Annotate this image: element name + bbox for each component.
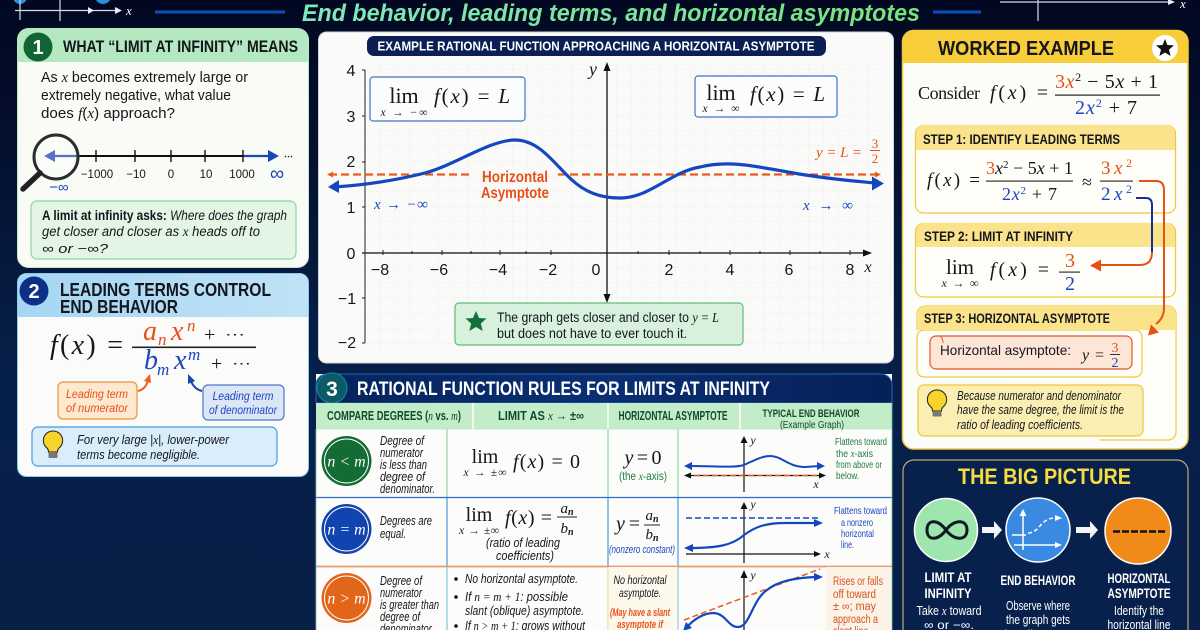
grid xyxy=(365,62,881,351)
row 2: n equals m: n xyxy=(653,533,659,544)
definition callout: get closer and closer as x heads off to xyxy=(42,224,260,239)
given function: 2x xyxy=(1075,97,1095,119)
title rule right xyxy=(933,10,981,14)
step 1: STEP 1: IDENTIFY LEADING TERMS xyxy=(923,132,1120,147)
limit at infinity caption: INFINITY xyxy=(924,586,972,601)
arrow xyxy=(1076,521,1098,539)
number badge 2 xyxy=(20,276,48,306)
graph note callout xyxy=(455,303,743,345)
step 1: + 7 xyxy=(1027,184,1057,204)
row 2: n equals m: b xyxy=(645,527,653,543)
step 1: 3x xyxy=(986,158,1003,178)
row 1: n less than m xyxy=(322,433,887,496)
answer box: y = xyxy=(1080,347,1104,364)
row 1: n less than m: f(x) = 0 xyxy=(513,451,580,473)
general rational formula: n xyxy=(158,330,166,349)
general rational formula: n xyxy=(187,316,196,335)
row 1: n less than m: x → ±∞ xyxy=(462,467,506,479)
asymptote equation: 2 xyxy=(872,151,878,166)
panel 3: rational function rules table xyxy=(316,373,892,630)
horizontal asymptote line xyxy=(327,172,881,178)
number line: −∞ xyxy=(49,179,69,196)
row 3: n greater than m: approach a xyxy=(833,614,878,626)
numerator label: Leading term xyxy=(66,387,128,401)
icon: magnifying glass xyxy=(23,135,78,189)
asymptote label xyxy=(481,169,549,202)
row 2: n equals m: a nonzero xyxy=(841,517,873,529)
column headers: LIMIT AS x → ±∞ xyxy=(498,408,584,423)
row 2: n equals m: equal. xyxy=(380,527,406,541)
row 1: n less than m: from above or xyxy=(836,459,882,471)
number badge 1: 1 xyxy=(32,37,44,59)
top banner xyxy=(13,0,1186,27)
panel: worked example xyxy=(902,30,1188,449)
x tick labels: −2 xyxy=(539,262,557,279)
row 2: n equals m: n xyxy=(568,527,574,538)
axes xyxy=(338,59,872,352)
x tick labels: −6 xyxy=(430,262,448,279)
given function: Consider xyxy=(918,83,980,103)
x tick labels: −8 xyxy=(371,262,389,279)
limit at infinity caption xyxy=(916,570,982,630)
step 1 xyxy=(916,125,1176,213)
row 3: n greater than m: Degree of xyxy=(380,574,423,588)
blue function curve xyxy=(328,140,884,198)
limit box left: x → −∞ xyxy=(380,107,428,119)
row 2: n equals m xyxy=(322,497,887,563)
step 1: ≈ xyxy=(1082,172,1092,192)
row 2: n equals m: a xyxy=(645,508,653,524)
row 2: n equals m: line. xyxy=(841,539,854,551)
badge n=m xyxy=(322,504,372,554)
y tick labels: 1 xyxy=(347,200,356,217)
tip callout xyxy=(32,427,277,466)
graph title pill xyxy=(367,36,826,56)
end behavior caption: the graph gets xyxy=(1006,613,1070,627)
given function: − 5 xyxy=(1082,71,1115,93)
tip callout: terms become negligible. xyxy=(77,447,200,462)
step 1: f(x) = xyxy=(927,170,980,191)
given function: x + 1 xyxy=(1115,71,1158,93)
limit box right xyxy=(695,76,837,117)
graph title pill: EXAMPLE RATIONAL FUNCTION APPROACHING A HORIZONTAL ASYMPTOTE xyxy=(378,40,814,54)
badge n>m: n > m xyxy=(327,590,366,608)
row 2: n equals m: n xyxy=(568,507,574,518)
step 1: x + 1 xyxy=(1037,158,1073,178)
column headers: (Example Graph) xyxy=(780,420,844,431)
explanation tip: ratio of leading coefficients. xyxy=(957,418,1083,432)
limit at infinity caption: LIMIT AT xyxy=(924,570,972,585)
row 3: n greater than m xyxy=(322,567,891,630)
end behavior caption: Observe where xyxy=(1006,599,1070,613)
step 3: STEP 3: HORIZONTAL ASYMPTOTE xyxy=(924,311,1110,326)
icon: star badge xyxy=(1152,35,1178,61)
general rational formula: ⋯ xyxy=(232,357,251,372)
intro question: does f(x) approach? xyxy=(41,105,175,122)
mini graph 3 xyxy=(683,568,823,630)
general rational formula: a xyxy=(143,316,157,347)
row 3: n greater than m: off toward xyxy=(833,589,876,601)
table grid lines xyxy=(316,403,892,630)
step 2 xyxy=(916,223,1176,297)
y tick labels: −2 xyxy=(338,335,356,352)
row 1: n less than m: Degree of xyxy=(380,434,425,448)
general rational formula: m xyxy=(157,360,169,379)
given function: 2 xyxy=(1096,96,1102,110)
step 1: 2 xyxy=(1126,156,1132,170)
row 3: n greater than m: No horizontal asymptote. xyxy=(465,571,578,586)
number line: ∞ xyxy=(270,163,284,185)
row 2: n equals m: Degrees are xyxy=(380,514,432,528)
row 2: n equals m: (ratio of leading xyxy=(486,536,560,550)
number badge 3 xyxy=(317,373,347,403)
horizontal asymptote caption: HORIZONTAL xyxy=(1108,571,1170,586)
general rational formula: + xyxy=(211,353,222,375)
row 1: n less than m: y = 0 xyxy=(622,447,662,469)
top right mini axes xyxy=(1000,0,1186,21)
intro question: extremely negative, what value xyxy=(41,87,231,104)
row 2: n equals m: y = xyxy=(614,513,640,535)
denominator label: of denominator xyxy=(209,403,278,417)
given function: 3x xyxy=(1055,71,1074,93)
title rule left xyxy=(155,10,285,14)
circle: infinity xyxy=(914,498,978,562)
row 1: n less than m: degree of xyxy=(380,470,426,484)
asymptote equation xyxy=(814,136,880,166)
mini graph 2 xyxy=(684,497,830,563)
step 1: − 5 xyxy=(1009,158,1037,178)
badge n>m xyxy=(322,573,372,623)
step 2: 2 xyxy=(1065,273,1075,295)
left approach label: x → −∞ xyxy=(373,197,428,213)
general rational formula: m xyxy=(188,345,200,364)
number badge 2: 2 xyxy=(28,281,40,303)
row 1: n less than m: the x-axis xyxy=(836,448,873,460)
end behavior caption xyxy=(1000,573,1076,630)
row 1: n less than m: denominator. xyxy=(380,482,435,496)
panel 2: leading terms control end behavior xyxy=(18,274,308,476)
given function xyxy=(918,70,1160,119)
given function: + 7 xyxy=(1103,97,1137,119)
explanation tip xyxy=(918,385,1143,436)
badge n<m: n < m xyxy=(327,454,366,470)
row 2: n equals m: x → ±∞ xyxy=(458,525,499,537)
row 1: n less than m: numerator xyxy=(380,446,424,460)
row 3: n greater than m: is greater than xyxy=(380,598,439,612)
row 1: n less than m: Flattens toward xyxy=(835,436,887,448)
panel: the big picture xyxy=(903,460,1188,630)
step 2: f(x) = xyxy=(990,259,1049,281)
row 3: n greater than m: numerator xyxy=(380,586,423,600)
row 2: n equals m: a xyxy=(560,501,568,517)
numerator label xyxy=(58,374,151,419)
step 2: STEP 2: LIMIT AT INFINITY xyxy=(924,229,1073,244)
row 3: n greater than m: (May have a slant xyxy=(610,607,671,619)
panel 3 heading: RATIONAL FUNCTION RULES FOR LIMITS AT INFINITY xyxy=(357,378,770,400)
mini graph 1: y xyxy=(749,433,756,447)
number badge 1 xyxy=(24,32,52,62)
x tick labels: −4 xyxy=(489,262,507,279)
asymptote equation: y = L = xyxy=(814,145,862,161)
x tick labels xyxy=(371,262,855,279)
step 2: 3 xyxy=(1065,250,1075,272)
number line: −1000 xyxy=(81,169,113,181)
horizontal asymptote caption: ASYMPTOTE xyxy=(1108,586,1170,601)
circle: horizontal asymptote xyxy=(1105,498,1171,564)
limit box left xyxy=(370,77,525,121)
row 2: n equals m: coefficients) xyxy=(496,549,554,563)
big picture heading: THE BIG PICTURE xyxy=(958,464,1131,489)
badge n=m: n = m xyxy=(327,522,366,538)
definition callout: A limit at infinity asks: Where does the graph xyxy=(42,208,287,223)
answer box: Horizontal asymptote: xyxy=(940,342,1071,358)
column headers: TYPICAL END BEHAVIOR xyxy=(762,408,860,420)
row 2: n equals m: (nonzero constant) xyxy=(609,544,675,556)
graph note callout: but does not have to ever touch it. xyxy=(497,326,687,341)
mini graph 2: y xyxy=(749,497,756,511)
row 3: n greater than m: degree of xyxy=(380,610,421,624)
row 1: n less than m: (the x-axis) xyxy=(619,469,667,483)
step 1: 2 xyxy=(1020,185,1026,197)
row 1: n less than m: below. xyxy=(836,470,859,482)
row 2: n equals m: lim xyxy=(466,504,493,526)
y tick labels: −1 xyxy=(338,291,356,308)
general rational formula: ⋯ xyxy=(225,328,245,343)
explanation tip: have the same degree, the limit is the xyxy=(957,403,1124,417)
row 3: n greater than m: asymptote. xyxy=(619,588,661,600)
row 2: n equals m: horizontal xyxy=(841,528,874,540)
definition callout: ∞ or −∞? xyxy=(42,241,109,256)
column headers: HORIZONTAL ASYMPTOTE xyxy=(618,408,728,423)
step 1: 2x xyxy=(1101,184,1122,205)
horizontal asymptote caption xyxy=(1108,571,1171,630)
y tick labels: 2 xyxy=(347,154,356,171)
right approach label: x → ∞ xyxy=(802,198,853,214)
step 1: 2x xyxy=(1002,184,1020,204)
row 1: n less than m: is less than xyxy=(380,458,427,472)
row 3: n greater than m: slant (oblique) asymptote. xyxy=(465,603,584,618)
step 1: 2 xyxy=(1003,159,1009,171)
row 2: n equals m: f(x) = xyxy=(505,507,552,529)
limit box left: f(x) = L xyxy=(434,84,510,108)
icon: light bulb xyxy=(927,390,947,416)
worked example heading: WORKED EXAMPLE xyxy=(938,37,1114,60)
mini graph 1 xyxy=(684,433,826,492)
subtitle: End behavior, leading terms, and horizontal asymptotes xyxy=(302,0,920,27)
column headers: COMPARE DEGREES (n vs. m) xyxy=(327,408,461,423)
denominator label xyxy=(188,374,284,420)
asymptote label: Horizontal xyxy=(482,169,548,186)
icon: light bulb xyxy=(43,431,63,458)
step 2: lim xyxy=(946,255,974,279)
intro question xyxy=(41,69,248,122)
panel 1 heading: WHAT “LIMIT AT INFINITY” MEANS xyxy=(63,38,298,56)
x tick labels: 2 xyxy=(665,262,674,279)
circle: end behavior xyxy=(1006,498,1070,562)
panel 1: what limit at infinity means xyxy=(18,28,308,268)
x tick labels: 0 xyxy=(592,262,601,279)
row 3: n greater than m: Rises or falls xyxy=(833,576,883,588)
row 1: n less than m: lim xyxy=(472,446,499,468)
definition callout xyxy=(31,201,296,259)
general rational formula: x xyxy=(173,345,187,376)
top left mini axes: x xyxy=(125,3,132,18)
y tick labels: 0 xyxy=(347,246,356,263)
y tick labels: 3 xyxy=(347,109,356,126)
given function: 2 xyxy=(1075,70,1081,84)
mini graph 2: x xyxy=(823,547,830,561)
numerator label: of numerator xyxy=(66,401,129,415)
arrow xyxy=(982,521,1002,539)
row 2: n equals m: n xyxy=(653,514,659,525)
general rational formula: b xyxy=(144,345,158,376)
connector arrows xyxy=(1090,181,1164,336)
limit at infinity caption: Take x toward xyxy=(916,604,982,618)
panel: example graph xyxy=(318,32,894,363)
x tick labels: 8 xyxy=(846,262,855,279)
given function: f(x) = xyxy=(990,82,1048,104)
asymptote label: Asymptote xyxy=(481,185,549,202)
denominator label: Leading term xyxy=(212,389,274,403)
number line: −10 xyxy=(126,169,146,181)
badge n<m xyxy=(322,436,372,486)
limit box left: lim xyxy=(389,83,419,108)
axes: x xyxy=(863,259,872,276)
step 3 xyxy=(917,306,1176,440)
horizontal asymptote caption: Identify the xyxy=(1114,604,1164,618)
limit box right: f(x) = L xyxy=(750,82,825,106)
panel 2 heading xyxy=(60,280,271,317)
column headers xyxy=(316,403,892,431)
limit box right: lim xyxy=(706,80,736,105)
row 3: n greater than m: If n = m + 1: possible xyxy=(465,589,568,604)
answer box xyxy=(930,336,1132,371)
intro question: As x becomes extremely large or xyxy=(41,69,248,86)
graph note callout: The graph gets closer and closer to y = L xyxy=(497,310,719,325)
panel 2 heading: LEADING TERMS CONTROL xyxy=(60,280,271,300)
explanation tip: Because numerator and denominator xyxy=(957,389,1122,403)
step 1: 3x xyxy=(1101,158,1122,179)
y tick labels: 4 xyxy=(347,63,356,80)
number line: ⋯ xyxy=(284,151,293,161)
y tick labels xyxy=(338,63,356,352)
row 3: n greater than m: ± ∞; may xyxy=(833,601,876,613)
row 2: n equals m: b xyxy=(560,521,568,537)
number badge 3: 3 xyxy=(326,378,338,401)
step 2: x → ∞ xyxy=(940,276,979,290)
icon: green star xyxy=(465,311,486,331)
step 1: 2 xyxy=(1126,182,1132,196)
row 3: n greater than m: No horizontal xyxy=(614,575,667,587)
general rational formula: + xyxy=(204,324,215,346)
x tick labels: 6 xyxy=(785,262,794,279)
row 2: n equals m: Flattens toward xyxy=(834,505,887,517)
tip callout: For very large |x|, lower-power xyxy=(77,432,230,447)
number line: 0 xyxy=(168,169,174,181)
general rational formula: x xyxy=(170,316,184,347)
general rational formula: f(x) = xyxy=(50,330,123,361)
x tick labels: 4 xyxy=(726,262,735,279)
end behavior caption: END BEHAVIOR xyxy=(1000,573,1076,588)
general rational formula xyxy=(50,316,256,379)
axes: y xyxy=(587,59,597,79)
mini graph 3: y xyxy=(749,568,756,582)
number line: 10 xyxy=(200,169,212,181)
answer box: 3 xyxy=(1112,341,1118,356)
top left mini axes xyxy=(13,0,132,21)
number line xyxy=(23,135,293,196)
mini graph 1: x xyxy=(812,477,819,491)
asymptote equation: 3 xyxy=(872,136,878,151)
panel 2 heading: END BEHAVIOR xyxy=(60,297,178,317)
number line: 1000 xyxy=(229,169,255,181)
limit box right: x → ∞ xyxy=(702,103,740,115)
answer box: 2 xyxy=(1112,356,1118,371)
